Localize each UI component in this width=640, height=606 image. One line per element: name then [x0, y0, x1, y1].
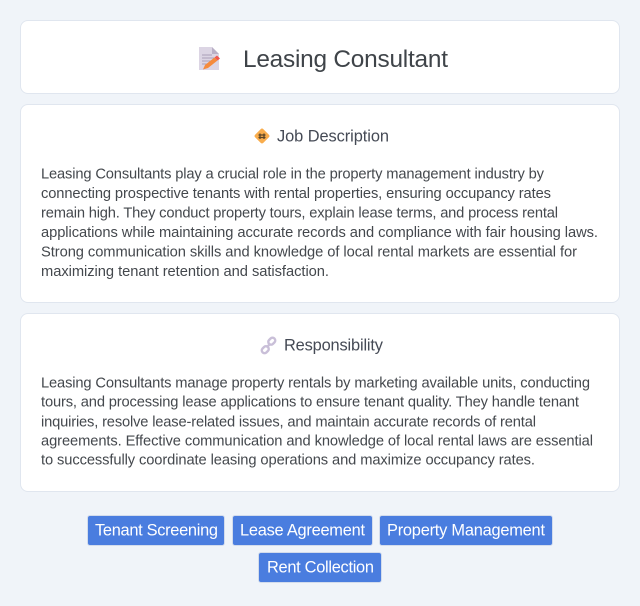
panel: job description [20, 104, 620, 303]
tag: Property Management [379, 515, 553, 546]
tag: Rent Collection: Rent Collection [267, 558, 374, 576]
text: job description body: maximizing tenant retention and satisfaction. [41, 264, 329, 280]
text: job description body [41, 166, 598, 280]
tag: Rent Collection [258, 552, 382, 583]
text: job description body: Strong communication skills and knowledge of local rental markets are essential for [41, 244, 577, 260]
text: responsibility body: to successfully coordinate leasing operations and maximize occupancy rates. [41, 452, 535, 468]
text: job description body: connecting prospective tenants with rental properties, ensuring occupancy rates [41, 186, 551, 202]
tag: Lease Agreement [232, 515, 373, 546]
text: job description body: remain high. They conduct property tours, explain lease terms, and process rental [41, 206, 558, 222]
icon: document with pencil [199, 47, 220, 70]
tag: Tenant Screening [87, 515, 225, 546]
panel: responsibility [20, 313, 620, 492]
text: responsibility body: tours, and processing lease applications to ensure tenant quality. They handle tenant [41, 394, 579, 410]
icon: chain link [260, 336, 276, 354]
text: job description body: applications while maintaining accurate records and compliance with fair housing laws. [41, 225, 598, 241]
text: responsibility body: agreements. Effective communication and knowledge of local rental laws are essential [41, 434, 593, 450]
tag: Tenant Screening: Tenant Screening [95, 522, 218, 540]
heading: Leasing Consultant: Leasing Consultant [243, 46, 448, 73]
heading: Job Description: Job Description [277, 128, 389, 146]
panel: title [20, 20, 620, 94]
text: responsibility body: inquiries, resolve lease-related issues, and maintain accurate records of rental [41, 414, 536, 430]
text: responsibility body [41, 376, 593, 468]
icon: construction diamond [254, 128, 270, 144]
tag: Property Management: Property Management [387, 522, 545, 540]
heading: Responsibility: Responsibility [284, 336, 384, 354]
tag: Lease Agreement: Lease Agreement [240, 522, 365, 540]
text: responsibility body: Leasing Consultants manage property rentals by marketing available units, conducting [41, 376, 590, 392]
text: job description body: Leasing Consultants play a crucial role in the property management industry by [41, 166, 545, 182]
